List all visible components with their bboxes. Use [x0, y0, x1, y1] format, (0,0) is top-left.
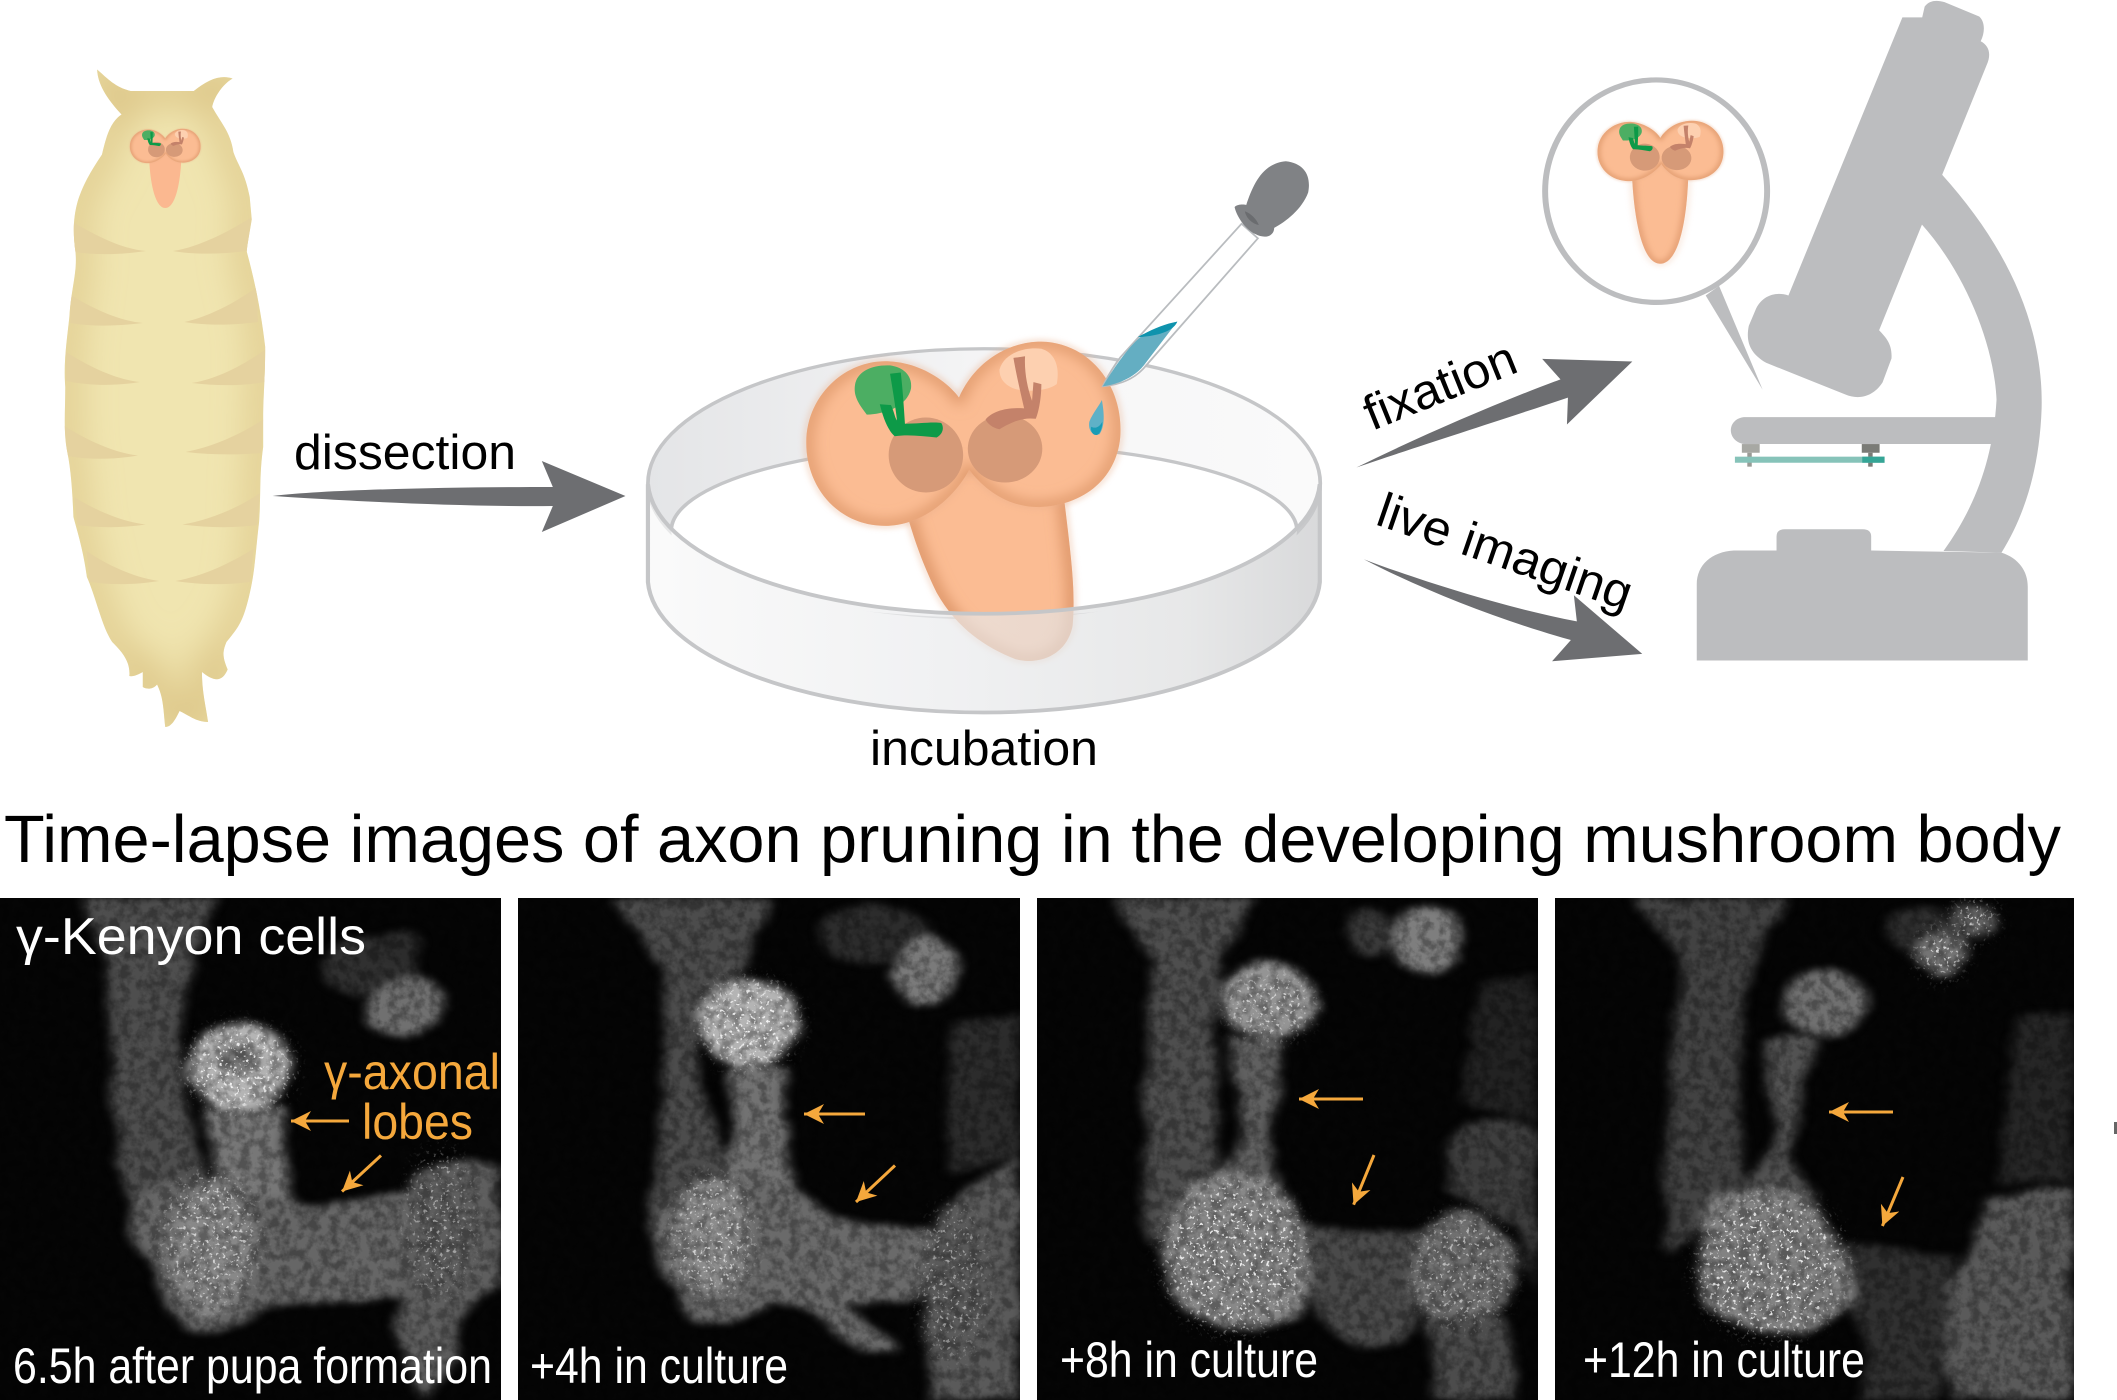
label: +12h in culture: +12h in culture — [1583, 1332, 1865, 1388]
panel gutters — [501, 898, 2117, 1400]
microscope — [1697, 1, 2042, 660]
microscopy image 1 — [79, 898, 502, 1399]
label: 6.5h after pupa formation: 6.5h after pupa formation — [13, 1338, 492, 1394]
microscopy image 2 — [611, 898, 1020, 1399]
larva brain — [128, 124, 203, 208]
microscope arm — [1921, 175, 2042, 553]
microscopy image 3 — [1110, 898, 1538, 1399]
brain in dish — [806, 342, 1121, 661]
label: gamma Kenyon cells: γ-Kenyon cells — [16, 908, 366, 966]
label: gamma axonal lobes: lobes — [362, 1094, 473, 1150]
arrow: live imaging — [1364, 559, 1642, 661]
title: Time-lapse images of axon pruning in the developing mushroom body — [4, 802, 2061, 877]
icon: dropper — [1089, 161, 1309, 435]
panel: +4h in culture — [518, 898, 1020, 1400]
panel: +8h in culture — [1037, 898, 1538, 1400]
label: +8h in culture: +8h in culture — [1060, 1332, 1318, 1388]
orange arrows panel 4 — [1829, 1112, 1903, 1226]
icon: drop — [1089, 400, 1104, 435]
petri dish back — [648, 349, 1320, 618]
label: gamma axonal lobes: γ-axonal — [324, 1044, 500, 1100]
arrow: dissection — [273, 461, 625, 532]
orange arrows panel 2 — [804, 1114, 895, 1202]
petri dish front wall — [648, 484, 1320, 713]
edge tick — [2114, 1122, 2117, 1134]
microscope slide and clips — [1735, 444, 1885, 467]
larva segment bands — [64, 217, 265, 584]
microscope stage — [1731, 417, 1997, 444]
orange arrows panel 3 — [1299, 1099, 1374, 1205]
orange arrows panel 1 — [291, 1121, 381, 1192]
magnifier callout — [1545, 80, 1767, 390]
label: +4h in culture: +4h in culture — [530, 1338, 788, 1394]
panel: 6.5h after pupa formation — [0, 898, 502, 1400]
label: live imaging: live imaging — [1370, 483, 1640, 621]
larva — [64, 70, 265, 727]
microscope tube — [1748, 1, 1989, 397]
label: gamma axonal lobes — [324, 1044, 500, 1150]
panel: +12h in culture — [1555, 898, 2074, 1400]
bright puncta texture — [151, 898, 2006, 1368]
microscopy image 4 — [1633, 898, 2074, 1399]
label: fixation: fixation — [1356, 331, 1524, 441]
microscope base — [1697, 529, 2028, 660]
arrow: fixation — [1356, 359, 1632, 468]
image grain — [0, 898, 2074, 1400]
label: dissection: dissection — [294, 426, 516, 480]
label: incubation: incubation — [870, 722, 1098, 776]
